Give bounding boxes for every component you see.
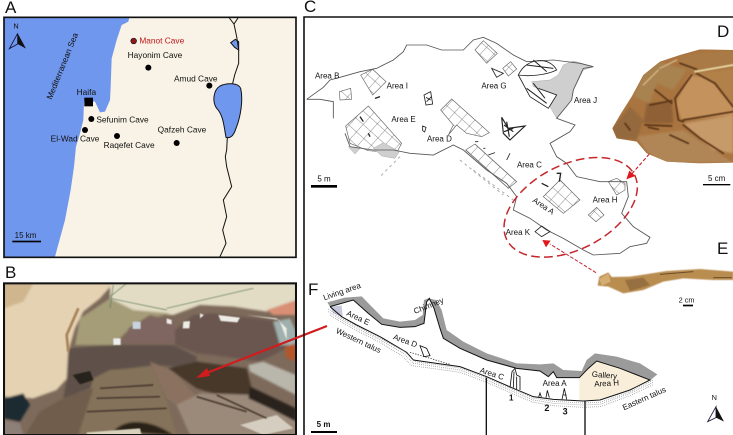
inner cave features (360, 60, 561, 237)
El-Wad Cave marker: El-Wad Cave (51, 134, 100, 144)
section labels: 2 (544, 403, 549, 413)
section labels: Area C (479, 366, 505, 382)
Amud Cave marker (174, 73, 218, 89)
El-Wad Cave marker (51, 127, 100, 144)
section labels: Area A (543, 379, 567, 388)
section labels: Western talus (334, 326, 382, 355)
Gallery Area H fill (579, 361, 650, 400)
grey roof band (327, 296, 657, 380)
Hayonim Cave marker: Hayonim Cave (128, 50, 183, 60)
talus stipple (328, 309, 653, 407)
scale bar 5 m (311, 420, 337, 433)
Raqefet Cave marker: Raqefet Cave (104, 140, 155, 150)
blue-grey living area fill (330, 306, 343, 317)
map frame (4, 17, 296, 257)
scale bar 5 m: 5 m (317, 420, 330, 429)
area labels: Area H (593, 196, 618, 205)
scale bar 2 cm: 2 cm (679, 295, 695, 304)
north arrow (708, 393, 724, 422)
area labels: Area D (427, 134, 452, 143)
label: Mediterranean Sea: Mediterranean Sea (44, 31, 80, 101)
area labels: Area A (531, 196, 556, 217)
panel F: cave section (311, 281, 724, 435)
red dashed arrow to Area H (626, 154, 649, 179)
Sefunim Cave marker: Sefunim Cave (96, 115, 149, 125)
red arrow from F to B (196, 326, 327, 378)
panel E: bone photo (598, 269, 733, 306)
area labels (315, 72, 618, 237)
panel letter B: B (5, 263, 16, 282)
section labels: 3 (563, 407, 568, 417)
section labels: Area H (594, 378, 619, 389)
map land background (4, 17, 296, 257)
red dashed arrow to Area K (542, 240, 596, 273)
Sea of Galilee (214, 84, 242, 138)
area labels: Area E (391, 115, 416, 124)
scale bar 5 m (311, 175, 337, 188)
section labels: Gallery (591, 370, 617, 381)
panel D: engraved stone photo (610, 47, 733, 167)
area labels: Area K (506, 228, 531, 237)
section labels (322, 281, 667, 417)
Qafzeh Cave marker (158, 125, 207, 146)
north arrow (9, 22, 26, 49)
section labels: 1 (509, 393, 514, 402)
dashed section lines (380, 157, 513, 200)
grey sediment areas (348, 61, 593, 158)
panel A: regional map (4, 17, 296, 257)
Haifa marker (77, 87, 96, 106)
scale bar 15 km: 15 km (15, 231, 37, 240)
section labels: Area D (392, 332, 419, 349)
Jordan river and border (220, 18, 239, 257)
scale bar 5 cm: 5 cm (708, 174, 726, 183)
section labels: Living area (322, 281, 362, 302)
area labels: Area I (387, 82, 408, 91)
north arrow: N (13, 22, 19, 31)
section labels: Area E (345, 309, 371, 327)
Raqefet Cave marker (104, 133, 155, 150)
scale bar 5 cm (703, 174, 730, 185)
Mediterranean Sea (4, 17, 129, 257)
area labels: Area J (574, 96, 597, 105)
photo frame (4, 283, 296, 435)
area labels: Area G (481, 82, 507, 91)
cave outline (307, 37, 650, 255)
photo highlights (133, 322, 141, 329)
dotted line (410, 352, 450, 364)
section lines (486, 378, 585, 435)
dashed red ellipse (488, 137, 654, 278)
north arrow: N (712, 393, 717, 402)
panel letter D: D (717, 22, 729, 41)
Amud Cave marker: Amud Cave (174, 73, 218, 83)
panel B: cave excavation photo (4, 283, 297, 435)
area labels: Area C (517, 161, 542, 170)
scale bar 5 m: 5 m (317, 175, 331, 184)
panel C frame (304, 17, 733, 435)
photo base (4, 283, 296, 435)
Hula lake (231, 39, 239, 50)
cave line drawing (330, 298, 650, 401)
Haifa marker: Haifa (77, 87, 96, 97)
area labels: Area B (315, 72, 339, 81)
Qafzeh Cave marker: Qafzeh Cave (158, 125, 207, 135)
scale bar 15 km (12, 231, 41, 242)
excavation grid squares (339, 41, 625, 222)
panel letter E: E (717, 239, 728, 258)
stalagmites (420, 346, 567, 399)
section labels: Eastern talus (621, 385, 667, 412)
Manot Cave marker: Manot Cave (139, 35, 185, 45)
panel letter F: F (308, 280, 318, 299)
Hayonim Cave marker (128, 50, 183, 71)
panel C: cave plan (307, 37, 654, 278)
section labels: Chimney (412, 296, 445, 316)
